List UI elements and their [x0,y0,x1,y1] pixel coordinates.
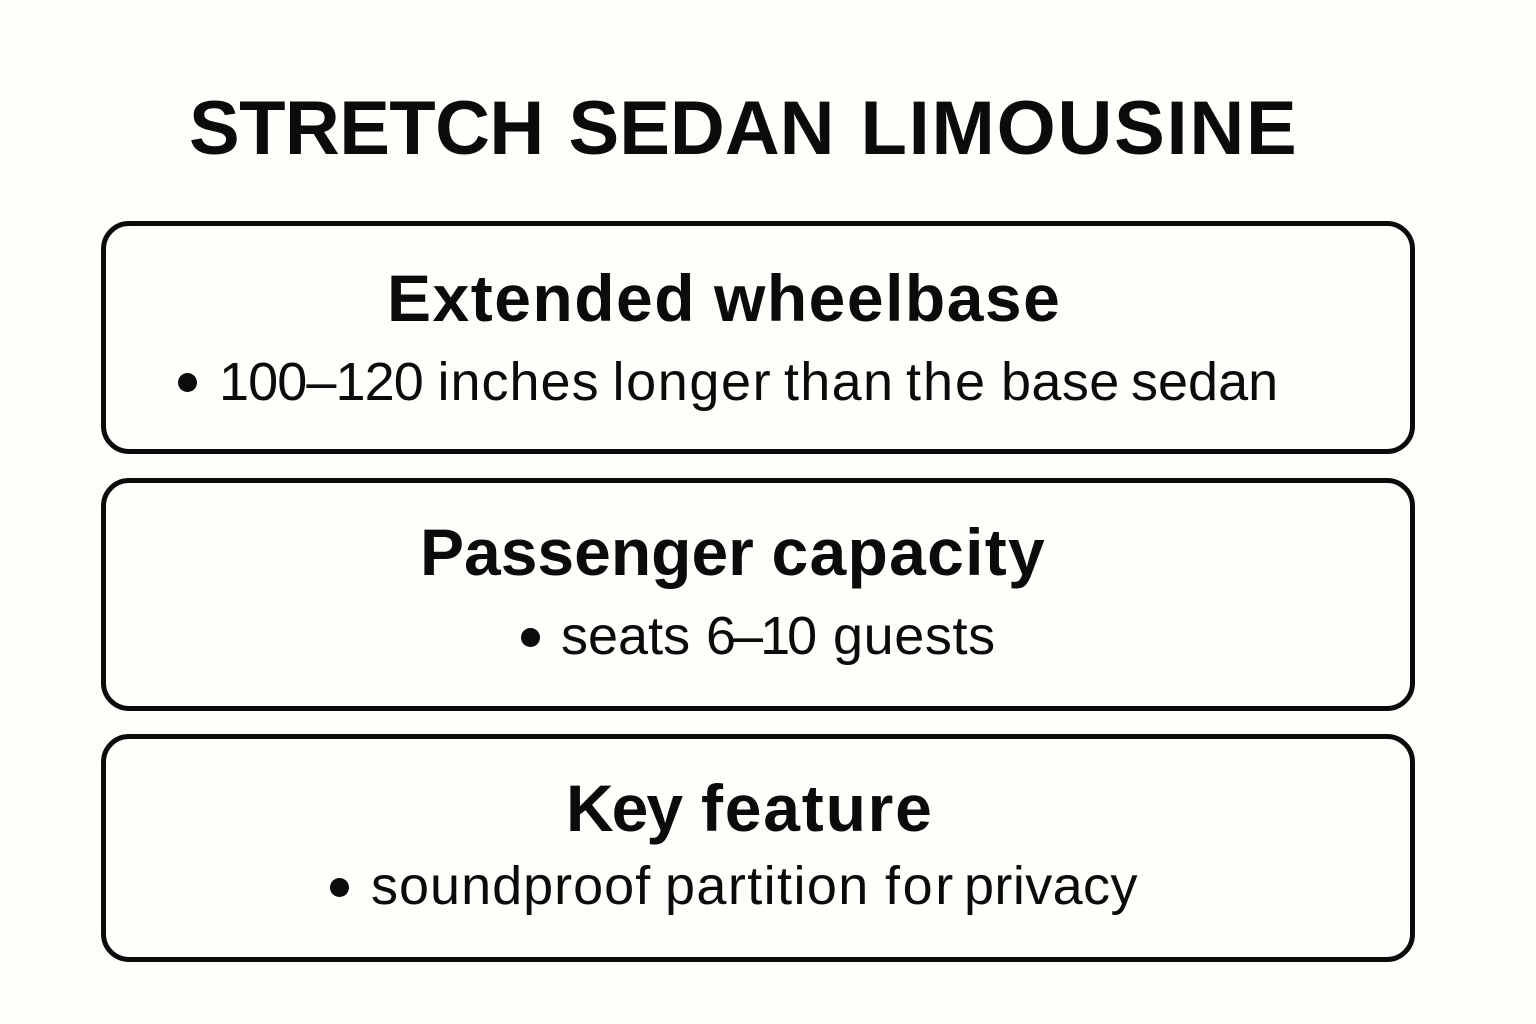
text: capacity: guests [833,606,996,666]
text: wheelbase: inches [438,352,600,412]
text: wheelbase: 100–120 [219,352,423,412]
text: wheelbase: the [906,352,987,412]
text: capacity: seats [561,606,690,666]
text: wheelbase [219,352,1278,412]
panel: passenger capacity [101,478,1415,711]
text: wheelbase: longer [612,352,772,412]
heading: passenger capacity: Passenger [420,515,754,589]
panel: extended wheelbase [101,221,1415,454]
panel: key feature [101,734,1415,962]
text: wheelbase: sedan [1131,352,1278,412]
title: STRETCH [189,86,544,171]
text: wheelbase: than [784,352,894,412]
text: wheelbase: base [1001,352,1120,412]
heading: passenger capacity [420,515,1046,589]
text: feature: partition [665,856,870,916]
heading: key feature [566,771,934,845]
bullet: capacity [521,628,540,647]
text: feature: for [885,856,956,916]
heading: key feature: Key [566,771,681,845]
text: feature [371,856,1138,916]
bullet: feature [330,878,349,897]
text: feature: soundproof [371,856,651,916]
title: LIMOUSINE [860,86,1298,171]
title: SEDAN [568,86,835,171]
bullet: wheelbase [178,373,197,392]
title [189,86,1298,171]
text: capacity: 6–10 [706,606,814,666]
heading: passenger capacity: capacity [772,515,1046,589]
heading: extended wheelbase: Extended [387,261,696,335]
heading: key feature: feature [701,771,934,845]
heading: extended wheelbase [387,261,1061,335]
text: feature: privacy [964,856,1138,916]
text: capacity [561,606,996,666]
heading: extended wheelbase: wheelbase [714,261,1061,335]
